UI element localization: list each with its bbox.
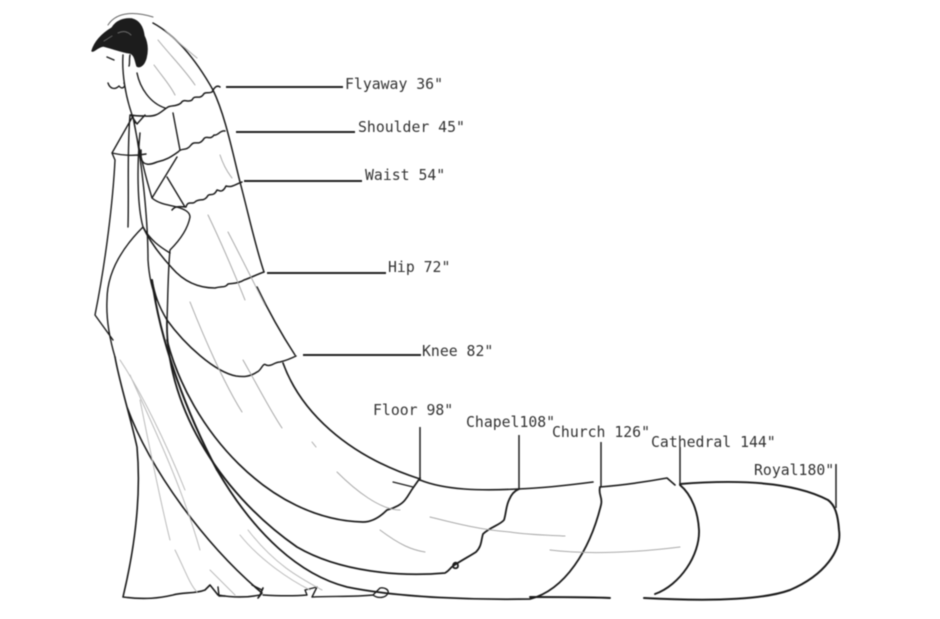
icon: hair (92, 19, 147, 67)
label: waist: Waist 54" (365, 167, 445, 184)
label: floor: Floor 98" (373, 402, 453, 419)
tier: shoulder hem (141, 131, 225, 164)
veil tiers (131, 86, 296, 377)
royal tier edge (644, 482, 839, 600)
dress silhouette (115, 357, 263, 598)
bodice and arm (95, 113, 190, 357)
label: cathedral: Cathedral 144" (651, 434, 776, 451)
chapel tier edge (167, 320, 519, 574)
bride figure (92, 14, 839, 600)
label: church: Church 126" (552, 424, 650, 441)
tier: flyaway hem (131, 86, 220, 116)
central dark fold and church tier edge (152, 280, 217, 470)
church tier edge (217, 470, 601, 599)
icon: hair highlights (104, 32, 131, 41)
floor tier edge (167, 340, 420, 522)
tier: hip hem (143, 227, 264, 288)
veil outer edge (283, 363, 420, 479)
label: flyaway: Flyaway 36" (345, 76, 443, 93)
faint veil fold lines (120, 30, 680, 595)
label: royal: Royal180" (754, 462, 834, 479)
cathedral tier edge (530, 485, 699, 598)
train hem of gown (218, 585, 388, 597)
label: knee: Knee 82" (422, 343, 493, 360)
labels (345, 76, 834, 479)
label: hip: Hip 72" (388, 259, 450, 276)
leader lines (226, 87, 836, 508)
tier: waist hem (172, 182, 242, 210)
veil top edge (420, 478, 675, 490)
label: shoulder: Shoulder 45" (358, 119, 465, 136)
veil comb arc (108, 14, 153, 25)
label: chapel: Chapel108" (466, 414, 555, 431)
face and neck (107, 55, 165, 123)
tier: knee hem (152, 280, 296, 377)
